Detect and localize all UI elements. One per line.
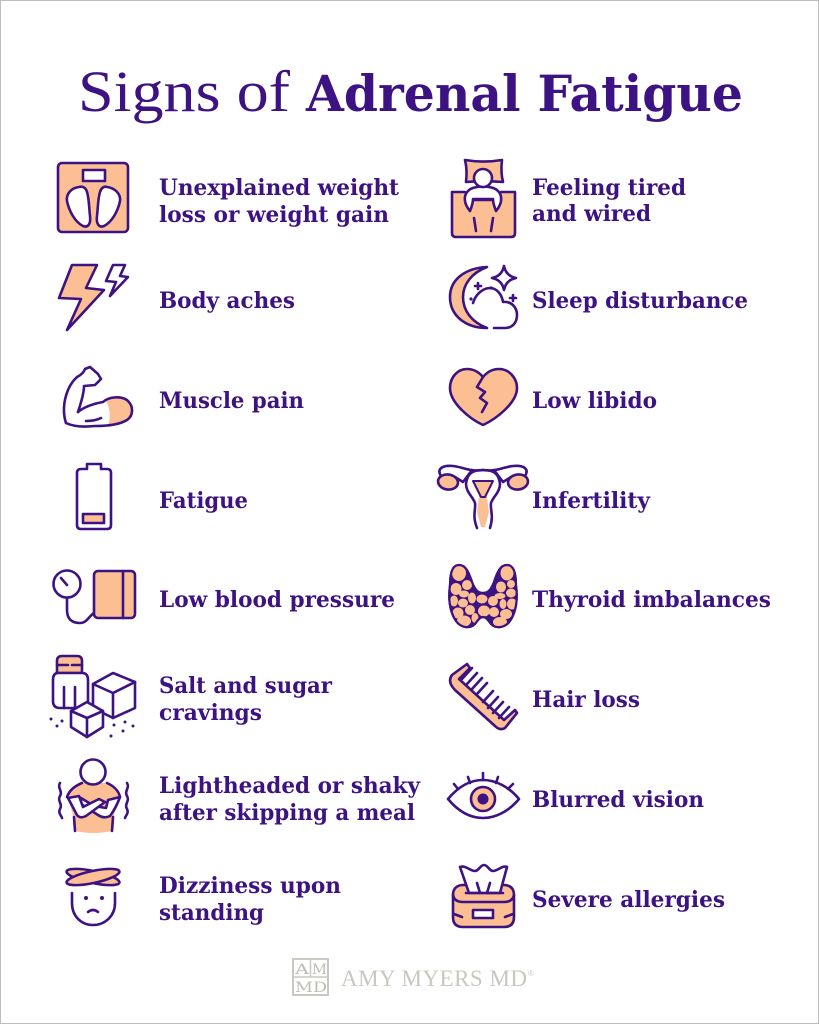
logo mark: MD (295, 980, 327, 996)
logo wordmark: AMY MYERS MD (341, 966, 527, 991)
label: salt and sugar (159, 673, 332, 726)
item: low blood pressure (54, 570, 395, 623)
icon: low battery (77, 464, 111, 529)
label: dizziness: Dizziness upon (159, 873, 341, 899)
item: low libido (450, 369, 657, 425)
title (78, 59, 743, 124)
icon: comb (450, 664, 517, 729)
icon: salt shaker and sugar cubes (50, 656, 135, 738)
icon: bathroom scale (58, 163, 128, 232)
label: lightheaded (159, 773, 421, 826)
icon: dizzy face (65, 866, 121, 925)
label: severe allergies: Severe allergies (532, 887, 725, 913)
label: tired and wired: and wired (532, 201, 651, 227)
item: salt and sugar (50, 656, 332, 738)
icon: flexed arm (64, 367, 132, 427)
item: body aches (59, 265, 295, 330)
icon: shaking person (59, 760, 128, 833)
label: lightheaded: after skipping a meal (159, 800, 415, 826)
logo: Amy Myers MD (293, 959, 534, 996)
icon: person in bed (452, 160, 515, 237)
title: Signs of (78, 59, 291, 124)
item: unexplained weight (58, 163, 400, 232)
label: low blood pressure: Low blood pressure (159, 587, 395, 613)
item: sleep disturbance (450, 266, 748, 328)
logo mark: A (294, 962, 310, 978)
label: salt and sugar: Salt and sugar (159, 673, 332, 699)
registered mark: ® (528, 969, 534, 978)
label: unexplained weight (159, 175, 400, 228)
item: lightheaded (59, 760, 421, 833)
item: infertility (437, 466, 651, 528)
icon: uterus (437, 466, 529, 528)
label: dizziness (159, 873, 341, 926)
item: severe allergies (453, 865, 725, 927)
icon: thyroid gland (449, 565, 517, 627)
item: fatigue (77, 464, 248, 529)
icon: tissue box (453, 865, 514, 927)
label: sleep disturbance: Sleep disturbance (532, 288, 748, 314)
label: infertility: Infertility (532, 488, 651, 514)
label: body aches: Body aches (159, 288, 295, 314)
item: dizziness (65, 866, 341, 926)
label: hair loss: Hair loss (532, 687, 640, 713)
icon: broken heart (450, 369, 517, 425)
label: dizziness: standing (159, 900, 264, 926)
label: muscle pain: Muscle pain (159, 388, 304, 414)
item: hair loss (450, 664, 640, 729)
icon: eye (448, 773, 519, 818)
title: Adrenal Fatigue (305, 64, 743, 123)
label: unexplained weight: Unexplained weight (159, 175, 400, 201)
label: tired and wired: Feeling tired (532, 175, 686, 201)
icon: moon, star and cloud (450, 266, 517, 328)
label: lightheaded: Lightheaded or shaky (159, 773, 421, 799)
label: salt and sugar: cravings (159, 700, 262, 726)
icon: lightning bolts (59, 265, 128, 330)
label: fatigue: Fatigue (159, 488, 248, 514)
label: unexplained weight: loss or weight gain (159, 202, 389, 228)
label: tired and wired (532, 175, 686, 227)
item: tired and wired (452, 160, 686, 237)
item: blurred vision (448, 773, 704, 818)
logo mark (293, 959, 328, 996)
item: thyroid (449, 565, 771, 627)
label: low libido: Low libido (532, 388, 657, 414)
icon: blood pressure cuff (54, 570, 135, 623)
label: blurred vision: Blurred vision (532, 787, 704, 813)
logo mark: M (312, 962, 327, 978)
label: thyroid: Thyroid imbalances (532, 587, 771, 613)
item: muscle pain (64, 367, 304, 427)
